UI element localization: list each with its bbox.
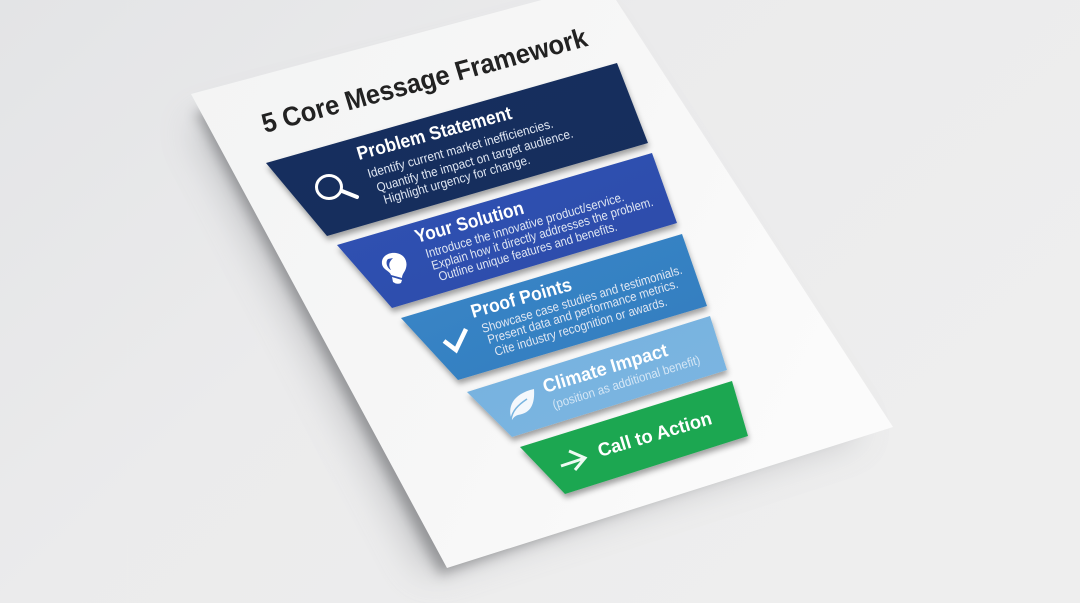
body: Problem Statement: Highlight urgency for change. [382,153,532,207]
heading: Problem Statement: Problem Statement [354,102,514,164]
icon: leaf [510,389,534,420]
body: Problem Statement: Quantify the impact on target audience. [375,127,575,195]
paper soft shadow [190,20,860,575]
body: Your Solution: Explain how it directly addresses the problem. [430,194,655,273]
icon: magnifying glass [316,176,357,198]
band 1 [266,63,648,236]
paper sheet [191,0,893,568]
heading: Proof Points: Proof Points [468,274,574,322]
panel: Proof Points [401,234,707,380]
title: 5 Core Message Framework [258,22,592,139]
band 2 [337,153,677,308]
body: Proof Points: Showcase case studies and testimonials. [480,262,684,336]
icon: arrow [561,451,585,470]
heading: Your Solution: Your Solution [412,197,526,247]
paper contact shadow [195,40,860,575]
body: Proof Points: Cite industry recognition or awards. [493,294,669,359]
icon: check mark [444,329,466,350]
subtext: Climate Impact: (position as additional benefit) [551,352,702,412]
band 4 [467,316,727,437]
icon: light bulb [382,253,407,284]
body: Proof Points: Present data and performance metrics. [486,276,680,347]
panel: Your Solution [337,153,677,308]
body: Your Solution: Introduce the innovative product/service. [424,189,626,261]
band 5 [520,381,748,494]
heading: Call to Action: Call to Action [595,407,714,461]
body: Problem Statement: Identify current market inefficiencies. [366,117,555,181]
panel: Problem Statement [266,63,648,236]
heading: Climate Impact: Climate Impact [540,339,671,397]
band 3 [401,234,707,380]
panel: Climate Impact [467,316,727,437]
body: Your Solution: Outline unique features and benefits. [437,219,619,284]
panel: Call to Action [520,381,748,494]
